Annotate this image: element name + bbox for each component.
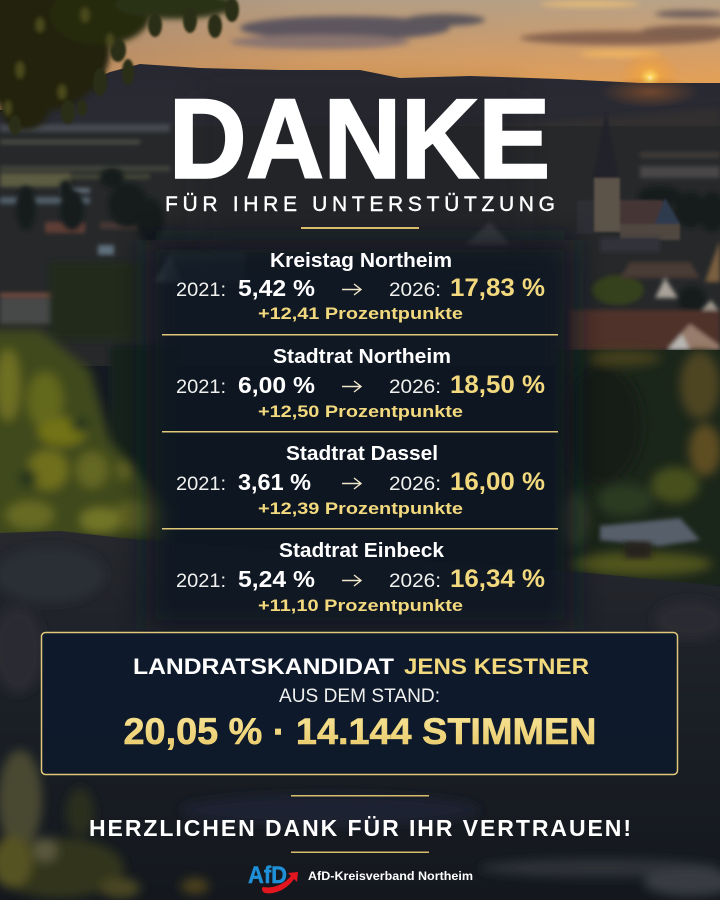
- result: Kreistag Northeim: Kreistag Northeim: [270, 250, 452, 272]
- closing message: HERZLICHEN DANK FÜR IHR VERTRAUEN!: [89, 815, 631, 841]
- result: Stadtrat Dassel: 3,61 %: [238, 469, 311, 495]
- result: Stadtrat Einbeck: 2021:: [176, 571, 226, 592]
- result: Stadtrat Einbeck: [176, 540, 545, 615]
- sun: [620, 48, 680, 108]
- candidate subline: AUS DEM STAND:: [279, 686, 440, 707]
- result: Stadtrat Dassel: 2021:: [176, 474, 226, 495]
- result: Kreistag Northeim: 17,83 %: [450, 274, 545, 302]
- result: Stadtrat Northeim: [176, 346, 545, 421]
- result: Stadtrat Northeim: 2026:: [389, 377, 441, 398]
- result: Kreistag Northeim: 5,42 %: [238, 275, 315, 301]
- sky: [0, 0, 720, 110]
- result: Stadtrat Dassel: 16,00 %: [450, 468, 545, 496]
- stone wall: [0, 531, 720, 900]
- result: Kreistag Northeim: 2021:: [176, 280, 226, 301]
- result: Stadtrat Einbeck: 2026:: [389, 571, 441, 592]
- dark overlay behind text: [146, 90, 574, 630]
- subtitle: FÜR IHRE UNTERSTÜTZUNG: [165, 193, 555, 216]
- result: Stadtrat Northeim: 18,50 %: [450, 371, 545, 399]
- result: Stadtrat Einbeck: Stadtrat Einbeck: [279, 540, 445, 562]
- arrow: [342, 381, 361, 392]
- panel: candidate result: [42, 632, 678, 774]
- church: [577, 112, 680, 240]
- candidate figures: 20,05 % · 14.144 STIMMEN: [124, 711, 596, 752]
- result: Stadtrat Dassel: [176, 443, 545, 518]
- left foliage: [0, 330, 170, 540]
- result: Stadtrat Dassel: Stadtrat Dassel: [286, 443, 438, 465]
- footer organisation: AfD-Kreisverband Northeim: [308, 869, 473, 883]
- result: Stadtrat Dassel: +12,39 Prozentpunkte: [258, 499, 463, 518]
- town and fields: [0, 124, 720, 366]
- result: Stadtrat Einbeck: 5,24 %: [238, 566, 315, 592]
- result: Stadtrat Northeim: 6,00 %: [238, 372, 315, 398]
- result: Stadtrat Northeim: Stadtrat Northeim: [273, 346, 451, 368]
- candidate heading: LANDRATSKANDIDAT: [133, 654, 395, 679]
- arrow: [342, 284, 361, 295]
- result: Kreistag Northeim: +12,41 Prozentpunkte: [258, 304, 463, 323]
- title: DANKE: [169, 76, 550, 202]
- left side: dark mid trees: [50, 262, 180, 540]
- clouds: [230, 1, 720, 57]
- bottom-left foliage: [0, 750, 209, 898]
- result: Stadtrat Einbeck: 16,34 %: [450, 565, 545, 593]
- icon: AfD logo: AfD: [248, 862, 287, 889]
- lower town: houses: [0, 222, 720, 350]
- trees in town: [16, 168, 720, 314]
- barn roof: [600, 518, 700, 546]
- result: Kreistag Northeim: 2026:: [389, 280, 441, 301]
- tree branch top-left: [0, 0, 239, 135]
- result: Kreistag Northeim: [176, 250, 545, 323]
- result: Stadtrat Dassel: 2026:: [389, 474, 441, 495]
- panel: candidate result: JENS KESTNER: [404, 654, 589, 679]
- result: Stadtrat Northeim: 2021:: [176, 377, 226, 398]
- arrow: [342, 478, 361, 489]
- hills: [0, 64, 720, 190]
- result: Stadtrat Einbeck: +11,10 Prozentpunkte: [258, 596, 463, 615]
- arrow: [342, 575, 361, 586]
- result: Stadtrat Northeim: +12,50 Prozentpunkte: [258, 402, 463, 421]
- right foliage: [555, 350, 720, 585]
